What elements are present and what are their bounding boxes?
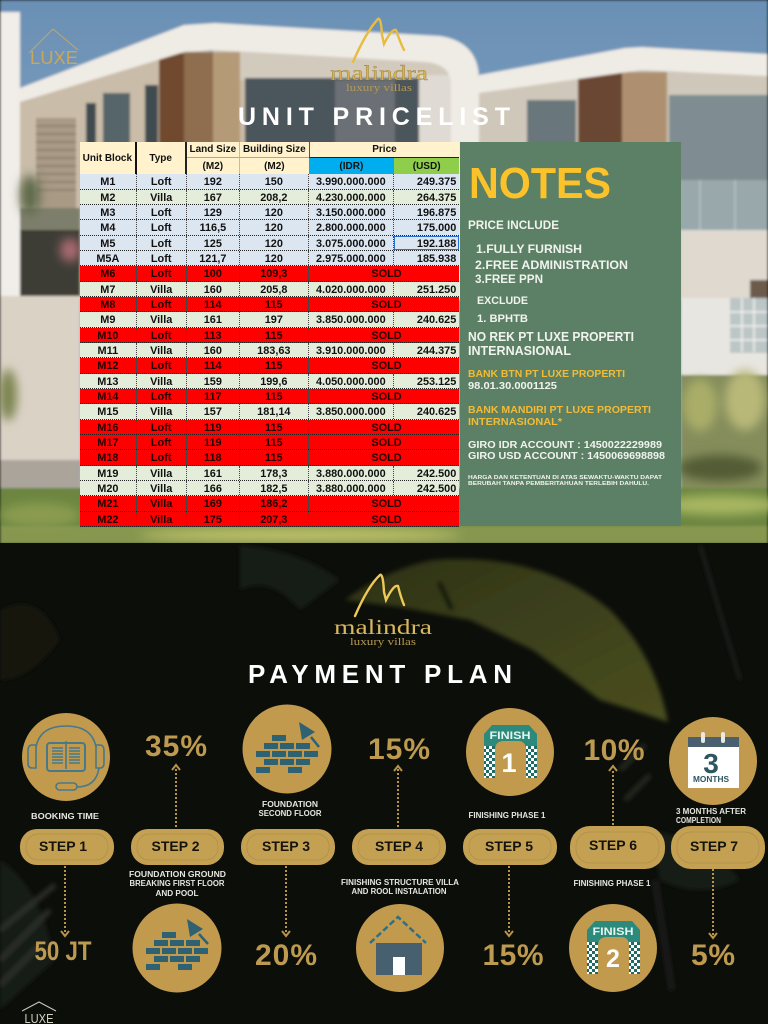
row M11: Villa bbox=[150, 345, 172, 357]
row M4 bbox=[80, 220, 459, 236]
step 4: STEP 4 bbox=[375, 838, 423, 854]
row M2: 4.230.000.000 bbox=[316, 192, 386, 204]
heading text: UNIT PRICELIST bbox=[238, 103, 510, 131]
row M13: M13 bbox=[97, 376, 118, 388]
caption: finishing structure villa bbox=[341, 878, 459, 896]
row M7: Villa bbox=[150, 284, 172, 296]
logo: luxe top left: LUXE bbox=[30, 48, 78, 68]
disclaimer: HARGA DAN KETENTUAN DI ATAS SEWAKTU-WAKTU DAPAT bbox=[468, 475, 663, 481]
percent values bbox=[34, 730, 735, 972]
row M6 bbox=[80, 266, 459, 282]
row M3: M3 bbox=[100, 207, 115, 219]
row M12: M12 bbox=[97, 360, 118, 372]
row M15: 240.625 bbox=[417, 406, 456, 418]
row M14: M14 bbox=[97, 391, 118, 403]
row M6: Loft bbox=[151, 268, 171, 280]
giro accounts bbox=[468, 440, 665, 462]
row M9: 3.850.000.000 bbox=[316, 314, 386, 326]
row M11: 160 bbox=[204, 345, 222, 357]
step captions bbox=[31, 800, 746, 898]
logo: malindra top bbox=[330, 19, 429, 94]
icon: calendar 3 months: MONTHS bbox=[693, 775, 730, 784]
heading: payment plan: PAYMENT PLAN bbox=[248, 659, 512, 689]
row M7 bbox=[80, 282, 459, 297]
section: payment plan bbox=[20, 574, 765, 1024]
caption: finishing structure villa: FINISHING STRUCTURE VILLA bbox=[341, 878, 459, 887]
caption: 3 months after completion: 3 MONTHS AFTER bbox=[676, 807, 746, 816]
icon: calendar 3 months bbox=[669, 717, 757, 805]
icon: brick wall second floor bbox=[242, 704, 332, 794]
logo: malindra bottom: luxury villas bbox=[350, 636, 416, 648]
row M22: SOLD bbox=[371, 514, 402, 526]
row M20: 182,5 bbox=[260, 483, 287, 495]
row M10: 115 bbox=[265, 330, 283, 342]
row M8 bbox=[80, 297, 459, 312]
row M3: 129 bbox=[204, 207, 222, 219]
row M9: 161 bbox=[204, 314, 222, 326]
step 5: STEP 5 bbox=[485, 838, 533, 854]
step 1 bbox=[20, 829, 114, 865]
row M14: 117 bbox=[204, 391, 222, 403]
row M11: 244.375 bbox=[417, 345, 456, 357]
row M5A: 120 bbox=[265, 253, 283, 265]
row M13: 199,6 bbox=[260, 376, 287, 388]
table header: (IDR) bbox=[339, 161, 363, 172]
row M22: 175 bbox=[204, 514, 222, 526]
row M19: Villa bbox=[150, 468, 172, 480]
arrow: step 2 to 35% bbox=[172, 765, 180, 827]
row M5: 3.075.000.000 bbox=[316, 238, 386, 250]
row M1: Loft bbox=[151, 176, 171, 188]
row M13: 159 bbox=[204, 376, 222, 388]
icon: finish line 2: 2 bbox=[606, 945, 620, 973]
row M22: M22 bbox=[97, 514, 118, 526]
price include list: 2.FREE ADMINISTRATION bbox=[475, 258, 628, 272]
row M7: 205,8 bbox=[260, 284, 287, 296]
value: 10%: 10% bbox=[584, 734, 644, 767]
row M5: 192.188 bbox=[417, 238, 456, 250]
row M5A: 121,7 bbox=[199, 253, 226, 265]
row M2: Villa bbox=[150, 192, 172, 204]
icon: calendar 3 months: 3 bbox=[703, 748, 719, 779]
giro accounts: GIRO IDR ACCOUNT : 1450022229989 bbox=[468, 440, 662, 451]
row M16: 119 bbox=[204, 422, 222, 434]
row M13: 4.050.000.000 bbox=[316, 376, 386, 388]
icon: finish line 1: FINISH bbox=[490, 730, 531, 742]
row M14: Loft bbox=[151, 391, 171, 403]
row M3: 196.875 bbox=[417, 207, 456, 219]
row M20 bbox=[80, 481, 459, 496]
value: 5%: 5% bbox=[691, 939, 735, 972]
row M13: 253.125 bbox=[417, 376, 456, 388]
arrow: step 7 to 5% bbox=[709, 869, 717, 938]
value: 20%: 20% bbox=[255, 939, 317, 972]
row M17: 119 bbox=[204, 437, 222, 449]
row M5: M5 bbox=[100, 238, 115, 250]
row M12: Loft bbox=[151, 360, 171, 372]
step pills bbox=[20, 826, 765, 869]
logo: malindra bottom bbox=[334, 575, 433, 648]
row M8: Loft bbox=[151, 299, 171, 311]
title: unit pricelist bbox=[28, 18, 510, 131]
row M16: SOLD bbox=[371, 422, 402, 434]
row M2: 208,2 bbox=[260, 192, 287, 204]
icon: finish line 1: 1 bbox=[501, 748, 517, 778]
row M8: 114 bbox=[204, 299, 222, 311]
icon: finish line 2: FINISH bbox=[592, 926, 634, 938]
row M5: Loft bbox=[151, 238, 171, 250]
account heading bbox=[468, 330, 634, 358]
row M18: 115 bbox=[265, 452, 283, 464]
row M11: M11 bbox=[98, 345, 118, 357]
row M16: Loft bbox=[151, 422, 171, 434]
step 5 bbox=[463, 829, 557, 865]
row M7: M7 bbox=[100, 284, 115, 296]
table header: (M2) bbox=[203, 161, 223, 172]
bank BTN: BANK BTN PT LUXE PROPERTI bbox=[468, 369, 625, 380]
row M18: Loft bbox=[151, 452, 171, 464]
table header: Type bbox=[149, 153, 172, 164]
row M6: SOLD bbox=[371, 268, 402, 280]
row M4: 2.800.000.000 bbox=[316, 222, 386, 234]
row M14 bbox=[80, 389, 459, 404]
price table bbox=[80, 142, 459, 527]
row M20: Villa bbox=[150, 483, 172, 495]
row M4: 175.000 bbox=[417, 222, 456, 234]
row M15: Villa bbox=[150, 406, 172, 418]
row M17 bbox=[80, 435, 459, 450]
row M7: 4.020.000.000 bbox=[316, 284, 386, 296]
row M3: 3.150.000.000 bbox=[316, 207, 386, 219]
row M1: 150 bbox=[265, 176, 283, 188]
row M6: 100 bbox=[204, 268, 222, 280]
row M3 bbox=[80, 205, 459, 220]
row M19 bbox=[80, 466, 459, 481]
exclude list: EXCLUDE bbox=[477, 295, 528, 307]
row M1 bbox=[80, 174, 459, 190]
step 2: STEP 2 bbox=[152, 838, 200, 854]
row M10: 113 bbox=[204, 330, 222, 342]
row M1: 3.990.000.000 bbox=[316, 176, 386, 188]
row M22: Villa bbox=[150, 514, 172, 526]
icon: finish line 2 bbox=[569, 904, 657, 992]
row M18 bbox=[80, 450, 459, 466]
row M18: 118 bbox=[204, 452, 222, 464]
row M21: M21 bbox=[97, 498, 118, 510]
row M11: 3.910.000.000 bbox=[316, 345, 386, 357]
row M17: SOLD bbox=[371, 437, 402, 449]
row M19: 242.500 bbox=[417, 468, 456, 480]
row M14: 115 bbox=[265, 391, 283, 403]
caption: finishing phase 1 top: FINISHING PHASE 1 bbox=[468, 811, 546, 820]
bank Mandiri: BANK MANDIRI PT LUXE PROPERTI bbox=[468, 405, 651, 416]
row M9 bbox=[80, 312, 459, 328]
row M20: 242.500 bbox=[417, 483, 456, 495]
row M6: 109,3 bbox=[260, 268, 287, 280]
row M15: 3.850.000.000 bbox=[316, 406, 386, 418]
row M17: Loft bbox=[151, 437, 171, 449]
caption: foundation ground breaking bbox=[129, 870, 226, 898]
caption: 3 months after completion bbox=[676, 807, 746, 825]
row M2: M2 bbox=[100, 192, 115, 204]
step 6 bbox=[570, 826, 665, 869]
table header: (M2) bbox=[264, 161, 285, 172]
price include list: 1.FULLY FURNISH bbox=[476, 242, 582, 256]
row M12: SOLD bbox=[371, 360, 402, 372]
row M5 bbox=[80, 236, 459, 251]
step 2 bbox=[131, 829, 224, 865]
row M8: 115 bbox=[265, 299, 283, 311]
giro accounts: GIRO USD ACCOUNT : 1450069698898 bbox=[468, 451, 665, 462]
caption: foundation ground breaking: FOUNDATION GROUND bbox=[129, 870, 226, 879]
logo: malindra top: luxury villas bbox=[346, 82, 412, 94]
row M9: Villa bbox=[150, 314, 172, 326]
bank BTN: 98.01.30.0001125 bbox=[468, 381, 557, 392]
row M11: 183,63 bbox=[257, 345, 290, 357]
row M3: 120 bbox=[265, 207, 283, 219]
bank Mandiri bbox=[468, 405, 651, 428]
row M6: M6 bbox=[100, 268, 115, 280]
value: 15% top: 15% bbox=[368, 733, 430, 766]
caption: foundation second floor: FOUNDATION bbox=[262, 800, 318, 809]
row M12: 114 bbox=[204, 360, 222, 372]
row M22: 207,3 bbox=[260, 514, 287, 526]
row M10: M10 bbox=[97, 330, 118, 342]
panel: notes bbox=[460, 142, 681, 526]
row M5A: 2.975.000.000 bbox=[316, 253, 386, 265]
row M16: M16 bbox=[97, 422, 118, 434]
price include list: 3.FREE PPN bbox=[475, 272, 543, 286]
table header: Unit Block bbox=[83, 153, 132, 164]
caption: foundation second floor: SECOND FLOOR bbox=[258, 809, 322, 818]
row M7: 160 bbox=[204, 284, 222, 296]
logo: malindra top: malindra bbox=[330, 61, 429, 85]
row M4: Loft bbox=[151, 222, 171, 234]
row M9: M9 bbox=[100, 314, 115, 326]
row M20: 3.880.000.000 bbox=[316, 483, 386, 495]
row M10 bbox=[80, 328, 459, 343]
caption: foundation second floor bbox=[258, 800, 322, 818]
row M13: Villa bbox=[150, 376, 172, 388]
row M10: Loft bbox=[151, 330, 171, 342]
arrow: step 3 to 20% bbox=[282, 866, 290, 936]
bank BTN bbox=[468, 369, 625, 392]
arrow: step 6 to 10% bbox=[609, 766, 617, 825]
row M5A bbox=[80, 251, 459, 266]
row M9: 197 bbox=[265, 314, 283, 326]
row M12: 115 bbox=[265, 360, 283, 372]
icon: house structure bbox=[356, 904, 444, 992]
value: 15% bottom: 15% bbox=[482, 939, 544, 972]
row M21: 186,2 bbox=[260, 498, 287, 510]
row M4: M4 bbox=[100, 222, 115, 234]
value: 50 JT: 50 JT bbox=[34, 936, 92, 966]
price include list bbox=[468, 218, 628, 286]
row M17: M17 bbox=[97, 437, 118, 449]
row M1: 249.375 bbox=[417, 176, 456, 188]
row M21: 169 bbox=[204, 498, 222, 510]
row M19: 178,3 bbox=[260, 468, 287, 480]
row M5: 125 bbox=[204, 238, 222, 250]
row M5A: M5A bbox=[96, 253, 119, 265]
row M15: M15 bbox=[97, 406, 118, 418]
caption: foundation ground breaking: BREAKING FIRST FLOOR bbox=[130, 879, 225, 888]
step 7: STEP 7 bbox=[690, 838, 738, 854]
account heading: INTERNASIONAL bbox=[468, 344, 571, 358]
row M19: 161 bbox=[204, 468, 222, 480]
row M17: 115 bbox=[265, 437, 283, 449]
arrow: step 4 to 15% bbox=[394, 766, 402, 827]
exclude list: 1. BPHTB bbox=[477, 313, 528, 325]
icon: brick wall ground floor bbox=[132, 904, 222, 992]
row M2 bbox=[80, 190, 459, 205]
row M21 bbox=[80, 496, 459, 512]
row M13 bbox=[80, 374, 459, 389]
account heading: NO REK PT LUXE PROPERTI bbox=[468, 330, 634, 344]
row M16 bbox=[80, 420, 459, 435]
row M10: SOLD bbox=[371, 330, 402, 342]
step 4 bbox=[352, 829, 446, 865]
row M21: SOLD bbox=[371, 498, 402, 510]
bank Mandiri: INTERNASIONAL* bbox=[468, 417, 562, 428]
table header: (USD) bbox=[413, 161, 441, 172]
row M1: 192 bbox=[204, 176, 222, 188]
background photo: villa exterior bbox=[0, 0, 768, 543]
step 1: STEP 1 bbox=[39, 838, 87, 854]
logo: luxe bottom left bbox=[22, 1002, 56, 1024]
row M18: M18 bbox=[97, 452, 118, 464]
table header: Building Size bbox=[243, 144, 306, 155]
icon: finish line 1 bbox=[466, 708, 554, 796]
row M8: M8 bbox=[100, 299, 115, 311]
notes heading: NOTES bbox=[469, 159, 611, 208]
table header: Price bbox=[372, 144, 397, 155]
table header: Land Size bbox=[189, 144, 236, 155]
row M4: 116,5 bbox=[200, 222, 226, 234]
row M7: 251.250 bbox=[417, 284, 456, 296]
row M8: SOLD bbox=[371, 299, 402, 311]
row M12 bbox=[80, 358, 459, 374]
step 3: STEP 3 bbox=[262, 838, 310, 854]
arrow: step 1 to 50 JT bbox=[61, 866, 69, 936]
row M22 bbox=[80, 512, 459, 527]
row M5A: 185.938 bbox=[417, 253, 456, 265]
row M19: M19 bbox=[97, 468, 118, 480]
row M21: Villa bbox=[150, 498, 172, 510]
row M5: 120 bbox=[265, 238, 283, 250]
row M2: 264.375 bbox=[417, 192, 456, 204]
icon: booking headset and book bbox=[22, 713, 110, 801]
caption: foundation ground breaking: AND POOL bbox=[156, 889, 199, 898]
table header bbox=[80, 142, 459, 174]
row M15 bbox=[80, 404, 459, 420]
logo: malindra bottom: malindra bbox=[334, 615, 433, 639]
caption: 3 months after completion: COMPLETION bbox=[676, 816, 721, 825]
row M4: 120 bbox=[265, 222, 283, 234]
step 3 bbox=[241, 829, 335, 865]
caption: finishing structure villa: AND ROOL INSTALATION bbox=[352, 887, 447, 896]
row M20: M20 bbox=[97, 483, 118, 495]
row M3: Loft bbox=[151, 207, 171, 219]
exclude list bbox=[477, 295, 528, 325]
row M11 bbox=[80, 343, 459, 358]
arrow: step 5 to 15% bbox=[505, 866, 513, 936]
row M18: SOLD bbox=[371, 452, 402, 464]
value: 35%: 35% bbox=[145, 730, 207, 763]
row M19: 3.880.000.000 bbox=[316, 468, 386, 480]
row M1: M1 bbox=[100, 176, 115, 188]
step 6: STEP 6 bbox=[589, 837, 637, 853]
row M15: 157 bbox=[204, 406, 222, 418]
price include list: PRICE INCLUDE bbox=[468, 218, 559, 232]
disclaimer bbox=[468, 475, 663, 487]
row M20: 166 bbox=[204, 483, 222, 495]
caption: finishing phase 1 bottom: FINISHING PHASE 1 bbox=[574, 879, 651, 888]
logo: luxe top left bbox=[29, 29, 78, 68]
disclaimer: BERUBAH TANPA PEMBERITAHUAN TERLEBIH DAHULU. bbox=[468, 481, 649, 487]
background: dark tropical foliage bbox=[0, 543, 768, 1006]
step 7 bbox=[671, 826, 765, 869]
row M16: 115 bbox=[265, 422, 283, 434]
row M2: 167 bbox=[204, 192, 222, 204]
row M9: 240.625 bbox=[417, 314, 456, 326]
row M15: 181,14 bbox=[257, 406, 290, 418]
row M5A: Loft bbox=[151, 253, 171, 265]
row M14: SOLD bbox=[371, 391, 402, 403]
caption: booking time: BOOKING TIME bbox=[31, 812, 99, 821]
